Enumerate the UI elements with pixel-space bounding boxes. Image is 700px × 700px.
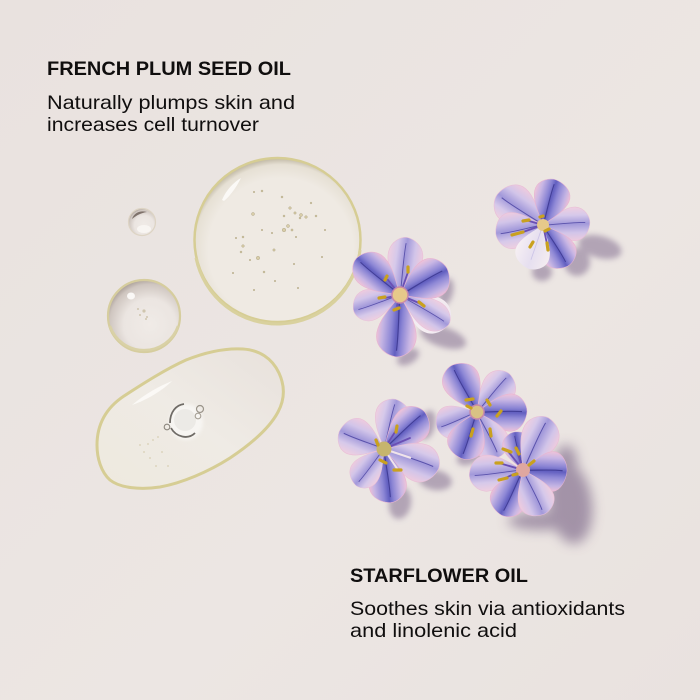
- title: French Plum Seed Oil: FRENCH PLUM SEED OIL: [47, 59, 291, 80]
- text block: French Plum Seed Oil description: increases cell turnover: [47, 114, 260, 136]
- shadow under lower right flower: [508, 445, 597, 547]
- flower: lower right: [468, 410, 568, 523]
- oil drop: medium: [108, 280, 180, 352]
- title: Starflower Oil: STARFLOWER OIL: [350, 566, 528, 587]
- flower: middle: [431, 356, 527, 465]
- oil drop: elongated blob with bubble: [97, 349, 283, 488]
- text block: Starflower Oil description: and linolenic acid: [350, 620, 517, 642]
- flower: lower left: [333, 395, 445, 505]
- text block: Starflower Oil description: Soothes skin via antioxidants: [350, 598, 625, 620]
- bubble with ring: [164, 404, 204, 440]
- flower: upper right: [487, 175, 591, 275]
- text block: Starflower Oil description: [350, 598, 625, 642]
- shadows under flowers: [386, 231, 624, 521]
- text block: French Plum Seed Oil description: [47, 92, 295, 136]
- flower: upper left: [345, 235, 458, 358]
- oil drop: tiny: [128, 208, 156, 236]
- oil drop: large round: [194, 158, 360, 324]
- text block: French Plum Seed Oil description: Naturally plumps skin and: [47, 92, 295, 114]
